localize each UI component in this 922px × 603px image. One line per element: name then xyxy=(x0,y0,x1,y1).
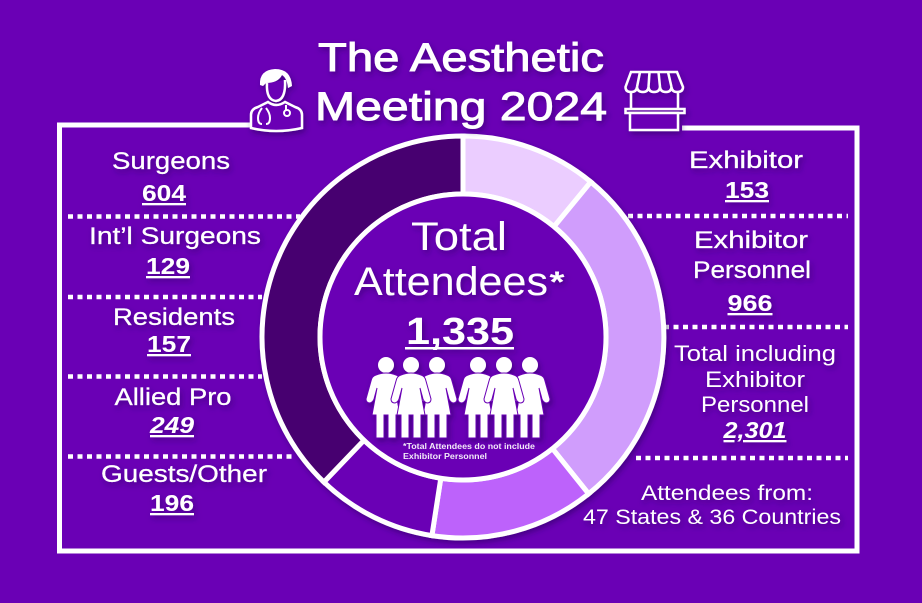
stat: Guests/Other: 196 xyxy=(150,490,194,516)
centre text xyxy=(354,215,565,353)
stat: Allied Pro: 249 xyxy=(149,412,194,438)
stat: Int'l Surgeons: Int’l Surgeons xyxy=(89,223,261,250)
stat: Attendees from: Attendees from: xyxy=(641,482,813,505)
footnote xyxy=(403,442,536,461)
segment: Allied xyxy=(324,440,441,536)
title: Meeting 2024 xyxy=(315,85,607,129)
stat: Exhibitor xyxy=(689,147,803,203)
stat: Attendees from xyxy=(583,482,841,529)
centre text: Attendees xyxy=(354,260,548,304)
divider lines xyxy=(68,216,848,458)
donut centre xyxy=(320,194,606,480)
stat: Guests/Other xyxy=(101,461,267,516)
icon: booth xyxy=(626,72,684,130)
stat: Allied Pro: Allied Pro xyxy=(114,384,232,411)
centre text: * xyxy=(550,266,565,299)
stat: Int'l Surgeons xyxy=(89,223,261,279)
segment: Exhibitor xyxy=(463,136,591,227)
footnote: *Total Attendees do not include xyxy=(403,442,536,451)
segment: Residents xyxy=(432,449,589,538)
stat: Surgeons: 604 xyxy=(142,180,186,206)
stat: Residents xyxy=(113,304,235,357)
stat: Guests/Other: Guests/Other xyxy=(101,461,267,488)
stat: Total including Exhibitor Personnel: Exhibitor xyxy=(705,367,805,392)
left labels xyxy=(89,148,267,516)
title: The Aesthetic xyxy=(318,36,604,80)
segment: Exhibitor Personnel xyxy=(552,182,664,494)
stat: Exhibitor Personnel: 966 xyxy=(728,290,772,316)
stat: Int'l Surgeons: 129 xyxy=(146,253,190,279)
segment: Surgeons xyxy=(262,136,463,482)
stat: Exhibitor: Exhibitor xyxy=(689,147,803,174)
stat: Residents: 157 xyxy=(147,331,191,357)
stat: Total including Exhibitor Personnel xyxy=(674,341,836,443)
icon: six people xyxy=(366,357,550,438)
stat: Exhibitor Personnel: Personnel xyxy=(693,257,811,284)
right labels xyxy=(583,147,841,529)
centre text: 1,335 xyxy=(406,311,514,353)
stat: Exhibitor: 153 xyxy=(725,177,769,203)
stat: Residents: Residents xyxy=(113,304,235,331)
stat: Surgeons: Surgeons xyxy=(112,148,230,175)
title xyxy=(315,36,607,129)
stat: Total including Exhibitor Personnel: 2,301 xyxy=(722,417,786,443)
centre text: Total xyxy=(411,215,507,259)
footnote: Exhibitor Personnel xyxy=(403,452,487,461)
donut chart xyxy=(262,136,664,538)
stat: Total including Exhibitor Personnel: Personnel xyxy=(701,392,809,417)
stat: Allied Pro xyxy=(114,384,232,438)
stat: Attendees from: 47 States & 36 Countries xyxy=(583,506,841,529)
stat: Total including Exhibitor Personnel: Total including xyxy=(674,341,836,366)
stat: Surgeons xyxy=(112,148,230,206)
stat: Exhibitor Personnel: Exhibitor xyxy=(694,227,808,254)
panel: white frame xyxy=(60,125,857,551)
icon: doctor xyxy=(251,69,302,131)
stat: Exhibitor Personnel xyxy=(693,227,811,316)
